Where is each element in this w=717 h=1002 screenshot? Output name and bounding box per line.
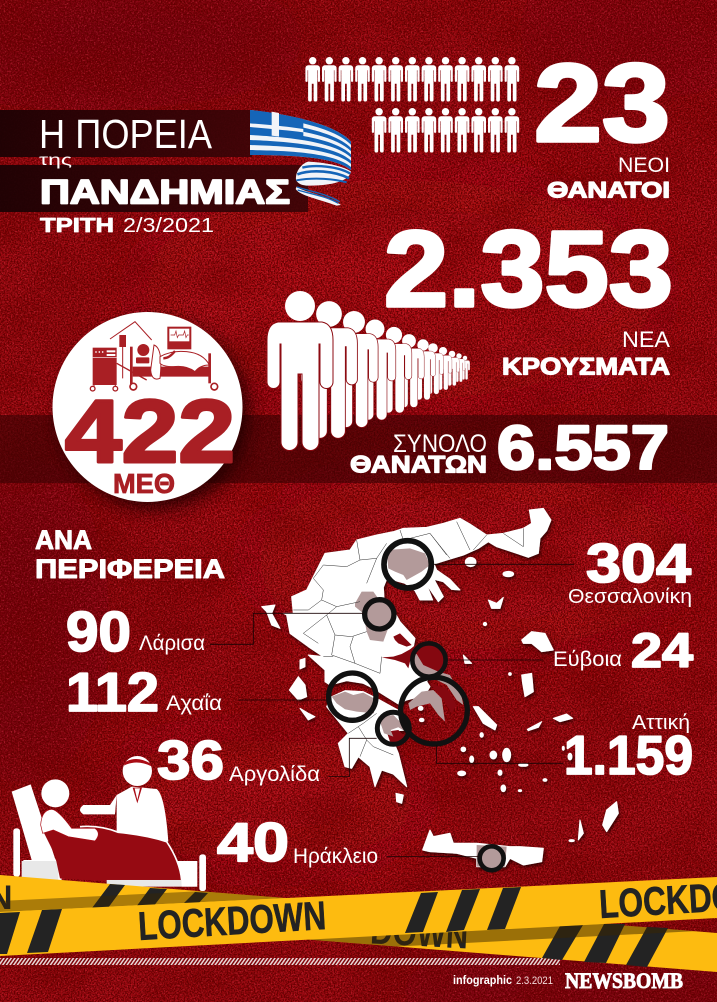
map of Greece [210, 508, 618, 870]
ICU label: ΜΕΘ [113, 468, 175, 499]
footer credit: infographic [453, 975, 513, 987]
logo: NEWSBOMB: NEWSBOMB [565, 968, 683, 993]
icon: Greek flag ribbon [250, 110, 351, 206]
region: Larissa: Λάρισα [139, 632, 205, 655]
back tape text fragments [0, 886, 696, 948]
date: 2/3/2021 [123, 215, 214, 237]
prefecture borders [293, 522, 523, 757]
region: Attica: Αττική [632, 712, 690, 734]
region: Argolida: Αργολίδα [229, 763, 320, 786]
land and islands [262, 508, 618, 867]
region: Argolida [157, 729, 320, 791]
ICU number: 422 [65, 381, 235, 481]
region: Evia [553, 625, 693, 678]
stripes: front tape [0, 887, 521, 954]
stat: total deaths: ΘΑΝΑΤΩΝ [350, 452, 487, 478]
region: Heraklion [217, 811, 378, 873]
icon: queue of people [267, 291, 470, 450]
icon row: 23 new deaths people [305, 57, 519, 153]
highlighted regions [332, 548, 507, 867]
region: Thessaloniki [568, 532, 692, 608]
icon: ICU bed [90, 322, 218, 391]
band: total deaths [0, 415, 717, 483]
markers [329, 541, 504, 870]
title [39, 111, 290, 237]
heading: by region [35, 525, 225, 584]
footer credit [453, 968, 683, 993]
heading: by region: ΠΕΡΙΦΕΡΕΙΑ [35, 554, 225, 584]
stat: total deaths: 6.557 [497, 414, 669, 483]
stat: new deaths: ΝΕΟΙ [618, 154, 670, 177]
region: Thessaloniki: Θεσσαλονίκη [568, 586, 692, 608]
region: Larissa: 90 [66, 600, 131, 664]
stat: new cases: ΚΡΟΥΣΜΑΤΑ [502, 354, 670, 380]
title band: lower [0, 165, 308, 212]
date: ΤΡΙΤΗ [40, 215, 114, 237]
region: Larissa [66, 600, 205, 664]
region: Heraklion: 40 [217, 811, 289, 873]
heading: by region: ΑΝΑ [35, 525, 92, 555]
region: Evia: 24 [631, 625, 693, 678]
stat: new deaths [534, 42, 670, 202]
stat: total deaths: ΣΥΝΟΛΟ [393, 430, 487, 458]
tape: back LOCKDOWN [0, 866, 717, 972]
stat: new cases: ΝΕΑ [622, 327, 670, 352]
tape: front LOCKDOWN [0, 872, 717, 956]
region: Evia: Εύβοια [553, 648, 622, 671]
region: Achaia [66, 661, 222, 723]
stat: total deaths [350, 414, 669, 483]
region: Attica: 1.159 [564, 724, 693, 786]
title band: upper [0, 110, 252, 157]
stat: new cases [384, 208, 673, 380]
footer credit: 2.3.2021 [516, 975, 553, 987]
date [40, 215, 214, 237]
stripes: back tape [92, 884, 668, 967]
title line 1: Η ΠΟΡΕΙΑ [39, 111, 213, 157]
region: Heraklion: Ηράκλειο [293, 845, 378, 868]
stat: new deaths: ΘΑΝΑΤΟΙ [547, 178, 670, 202]
region: Argolida: 36 [157, 729, 224, 791]
back tape text fragments: DOWN [369, 910, 469, 957]
icon: doctor and patient [12, 756, 206, 891]
hatched strip [0, 958, 560, 965]
panel: ICU badge [52, 312, 250, 510]
region: Achaia: Αχαΐα [166, 692, 222, 715]
stat: new cases: 2.353 [384, 208, 673, 329]
text: LOCKDOWN front: LOCKDOWN [137, 894, 327, 949]
title line 2: της [39, 152, 72, 169]
title line 3: ΠΑΝΔΗΜΙΑΣ [40, 174, 290, 212]
leader lines [210, 564, 574, 857]
dark gulfs and sea patches [382, 633, 457, 743]
region: Achaia: 112 [66, 661, 159, 723]
region: Thessaloniki: 304 [586, 532, 691, 594]
stat: new deaths: 23 [534, 42, 670, 165]
